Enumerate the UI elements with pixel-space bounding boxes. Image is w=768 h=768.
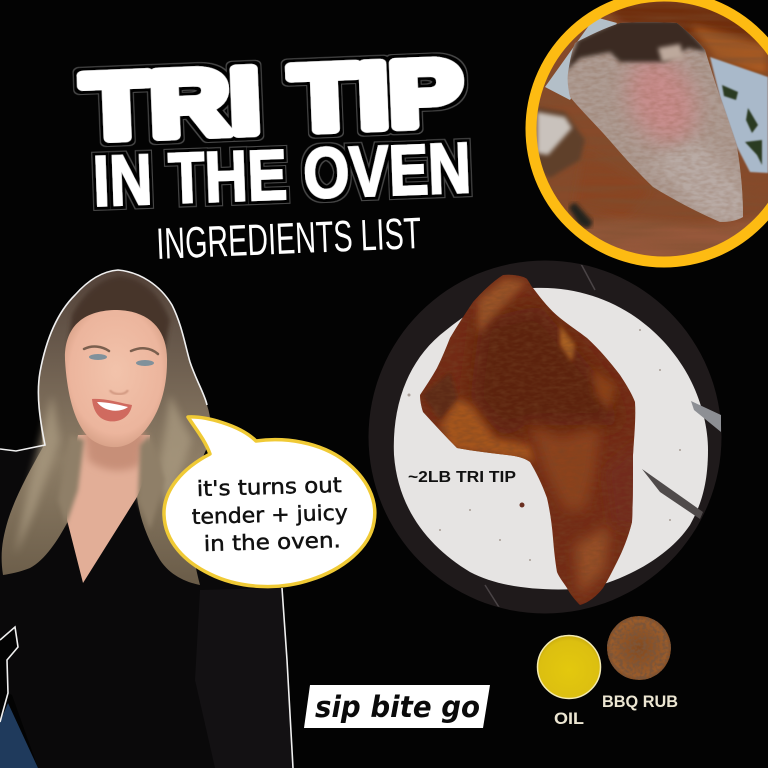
yellow ring xyxy=(531,0,768,262)
eyebrows xyxy=(84,347,158,354)
white plate xyxy=(394,288,708,589)
bubble shape xyxy=(164,417,375,587)
ingredient: oil xyxy=(538,636,600,728)
black top and sleeves xyxy=(0,445,293,768)
bubble text: it's turns out xyxy=(196,473,342,501)
serving fork tines xyxy=(642,401,721,519)
knife blade right side xyxy=(710,57,768,173)
eyes xyxy=(89,354,154,366)
ingredient: bbq rub xyxy=(602,614,678,711)
white cutout outline xyxy=(0,270,293,768)
bubble text xyxy=(191,473,348,556)
lighter lower slice xyxy=(656,142,743,222)
dark round board xyxy=(368,260,722,614)
neck and chest xyxy=(67,435,150,583)
photo: raw rubbed tri tip on white plate xyxy=(368,260,722,614)
bubble text: in the oven. xyxy=(203,528,341,556)
neck shadow xyxy=(84,432,146,470)
title: tri tip in the oven xyxy=(81,42,472,269)
label: ~2LB TRI TIP: ~2LB TRI TIP xyxy=(408,469,516,486)
meat fibres xyxy=(420,284,636,590)
mouth xyxy=(92,399,132,421)
label: oil: OIL xyxy=(554,709,584,728)
pink centre of slice xyxy=(624,62,700,146)
logo: sip bite go: sip bite go xyxy=(315,690,480,724)
jeans xyxy=(0,703,38,768)
herbs xyxy=(722,85,762,165)
hair xyxy=(2,270,211,585)
plate speckles xyxy=(408,329,681,561)
wooden cutting board xyxy=(530,0,768,262)
title line: TRI TIP: TRI TIP xyxy=(81,42,464,159)
seared crust xyxy=(565,20,708,72)
tri tip meat xyxy=(415,270,640,610)
small meat slice xyxy=(537,107,585,178)
knife blade xyxy=(545,17,617,100)
orange rub patches xyxy=(440,398,535,462)
bubble text: tender + juicy xyxy=(191,501,348,529)
right sleeve shade xyxy=(195,588,293,768)
subtitle: ingredients list: INGREDIENTS LIST xyxy=(155,209,422,269)
dark seasoning area xyxy=(470,305,620,440)
hair highlights xyxy=(15,395,192,555)
speech bubble xyxy=(164,417,375,587)
icon: oil circle xyxy=(538,636,600,698)
meat fibres xyxy=(568,49,743,222)
photo: sliced cooked tri tip in yellow ring xyxy=(530,0,768,262)
icon: bbq rub circle xyxy=(607,616,671,680)
nose xyxy=(110,390,128,394)
person: woman smiling in black top xyxy=(0,270,293,768)
main slice xyxy=(568,22,743,222)
face xyxy=(65,310,167,447)
title line: IN THE OVEN: IN THE OVEN xyxy=(92,129,472,222)
label: bbq rub: BBQ RUB xyxy=(602,692,678,711)
darker hair crown xyxy=(68,276,170,350)
hair locks over neck xyxy=(58,435,165,530)
